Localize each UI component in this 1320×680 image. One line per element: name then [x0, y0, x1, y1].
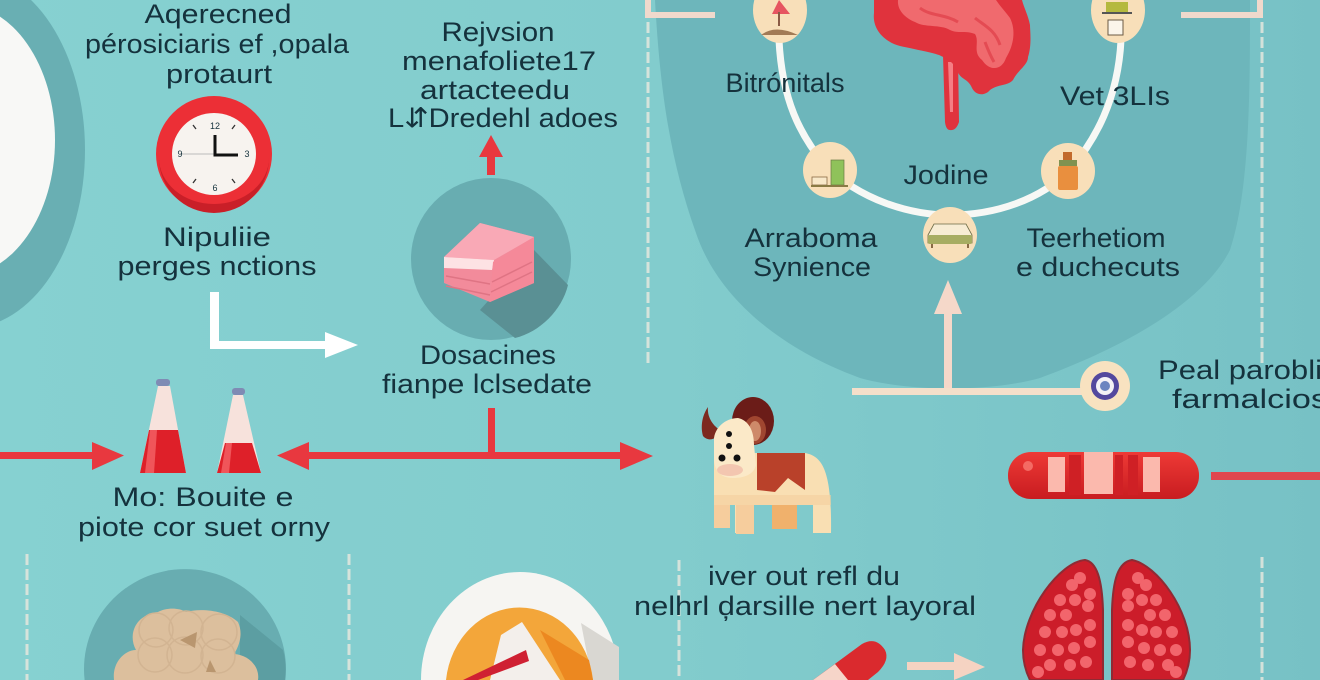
icon: grain pile in teal circle — [84, 569, 286, 680]
heading: top left text — [85, 0, 350, 89]
icon: clock — [156, 96, 272, 213]
ring labels — [726, 68, 1180, 282]
heading: top left text: pérosiciaris ef ,opala — [85, 29, 350, 59]
arrow: peach right — [907, 653, 985, 680]
large white plate at left edge — [0, 0, 85, 328]
text: Mo: Bouite e: Mo: Bouite e — [112, 482, 294, 512]
ring labels: Arraboma — [744, 223, 879, 253]
icon: clock: 3 — [244, 149, 250, 159]
icon: plate with orange circle and red stick — [421, 572, 619, 680]
text: iver out refl du: nelhrl ḑarsille nert layoral — [634, 591, 976, 621]
brain — [874, 0, 1030, 130]
text: Peal parobli — [1158, 355, 1320, 414]
text: Rejvsion block: menafoliete17 — [402, 46, 596, 76]
ring connector — [779, 40, 1121, 215]
line: red right connector — [1211, 472, 1320, 480]
text: iver out refl du: iver out refl du — [708, 561, 900, 591]
central teal panel — [655, 0, 1250, 388]
icon: node top left — [753, 0, 807, 43]
icon: pink stack in teal circle — [411, 178, 571, 340]
heading: top left text: protaurt — [166, 59, 273, 89]
icon: red capsule — [1008, 452, 1199, 499]
text: Rejvsion block — [388, 17, 618, 133]
icon: node green bottle — [803, 142, 857, 198]
ring labels: Synience — [753, 252, 871, 282]
text: Dosacines — [382, 340, 592, 399]
icon: clock: 12 — [210, 121, 220, 131]
text: Peal parobli: Peal parobli — [1158, 355, 1320, 385]
text: Rejvsion block: artacteedu — [420, 75, 570, 105]
arrow: red up — [479, 135, 503, 175]
icon: node orange bottle — [1041, 143, 1095, 199]
icon: red kidneys — [1023, 560, 1190, 680]
text: Mo: Bouite e — [78, 482, 331, 542]
text: Nipuliie perges nctions — [118, 222, 316, 281]
icon: pill bottom — [813, 641, 886, 680]
text: Dosacines: fianpe lclsedate — [382, 369, 592, 399]
text: iver out refl du — [634, 561, 976, 621]
arrow: white elbow — [210, 292, 358, 358]
text: Rejvsion block: L⇵Dredehl adoes — [388, 103, 618, 133]
icon: node top right — [1091, 0, 1145, 43]
text: Nipuliie perges nctions: perges nctions — [118, 251, 316, 281]
ring labels: Vet 3LIs — [1060, 81, 1170, 111]
icon: clock: 9 — [177, 149, 183, 159]
arrow: peach up connector — [852, 280, 1084, 395]
text: Nipuliie perges nctions: Nipuliie — [163, 222, 271, 252]
ring labels: Jodine — [904, 160, 988, 190]
icon: red flasks — [140, 379, 261, 473]
icon: eye node — [1080, 361, 1130, 411]
text: Mo: Bouite e: piote cor suet orny — [78, 512, 331, 542]
icon: node bottom bed — [923, 207, 977, 263]
text: Peal parobli: farmalcios — [1172, 384, 1320, 414]
ring labels: Teerhetiom — [1026, 223, 1166, 253]
arrows: red horizontal connectors — [0, 408, 653, 470]
ring labels: Bitrónitals — [726, 68, 844, 98]
text: Dosacines: Dosacines — [420, 340, 556, 370]
icon: cow — [702, 397, 831, 534]
node icons on ring — [753, 0, 1145, 263]
icon: clock: 6 — [212, 183, 218, 193]
ring labels: e duchecuts — [1016, 252, 1180, 282]
text: Rejvsion block: Rejvsion — [442, 17, 554, 47]
